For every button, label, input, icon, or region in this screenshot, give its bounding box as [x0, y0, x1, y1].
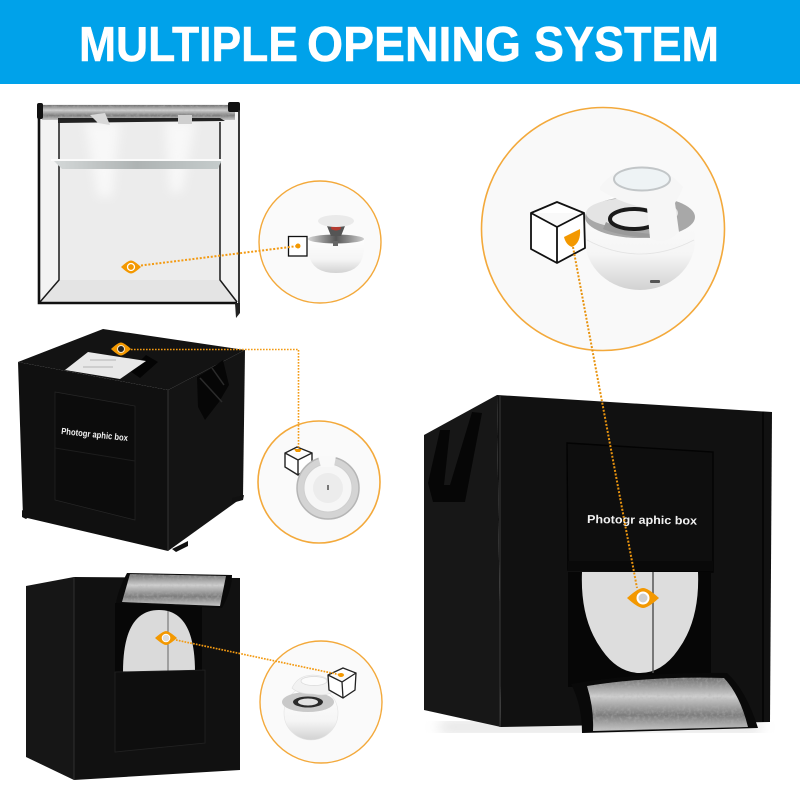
target dot one [296, 244, 300, 248]
dotted connector: box one to speaker [141, 246, 298, 266]
title banner: SYSTEM [534, 18, 719, 72]
panel: large light box [424, 395, 772, 733]
callout circle: speaker open view [260, 641, 382, 763]
dotted connector: box two to speaker [131, 350, 298, 448]
title banner: OPENING [307, 18, 521, 72]
panel: closed light box with top opening [18, 329, 245, 552]
eye marker one [121, 260, 141, 274]
callout circle: speaker top view [258, 421, 380, 543]
panel: closed light box with top opening: Photogr aphic box [61, 426, 128, 443]
target dot three [338, 673, 344, 677]
dotted connector: large speaker to box [573, 247, 637, 588]
callout circle: speaker front view [259, 181, 381, 303]
eye marker two [111, 342, 131, 356]
callout circle: large speaker view [482, 108, 724, 350]
dotted connector: box three to speaker [176, 640, 341, 675]
eye marker four [627, 588, 659, 608]
title banner [0, 0, 800, 84]
panel: light box with rolled flap [26, 573, 240, 780]
eye marker three [155, 631, 177, 645]
title banner: MULTIPLE [79, 18, 298, 72]
panel: large light box: Photogr aphic box [587, 514, 698, 528]
panel: open-front light box [37, 102, 240, 318]
target dot two [294, 449, 302, 452]
